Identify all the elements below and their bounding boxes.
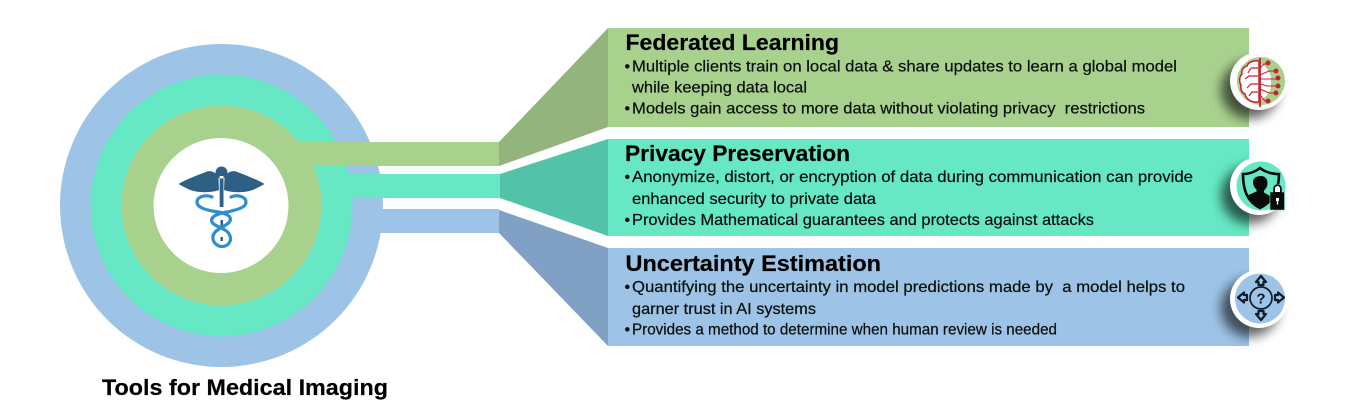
bullet list: Provides Mathematical guarantees and protects against attacks [632,212,1094,229]
bullet list: Anonymize, distort, or encryption of data during communication can provide [632,169,1193,186]
midline [1259,58,1261,107]
caption: Tools for Medical Imaging [102,375,388,400]
connector trapezoid [499,28,608,166]
wings [178,171,264,192]
bullet list: Quantifying the uncertainty in model predictions made by a model helps to [632,279,1185,296]
heading: Federated Learning [626,30,839,55]
lock [1270,184,1284,210]
concentric target with connector bars [60,44,500,367]
icon: uncertainty arrows [1221,270,1288,337]
ball and staff [216,166,228,241]
panel: uncertainty estimation [499,210,1249,346]
serpents [197,196,231,246]
bullet list [624,58,1177,118]
question mark: ? [1256,290,1266,308]
bullet list: while keeping data local [631,80,807,96]
panel: federated learning [499,28,1249,166]
four arrows [1238,276,1284,320]
badge ring [1230,157,1288,215]
centre circle [1250,287,1272,309]
icon: brain and circuit [1221,52,1288,119]
bullet list [624,279,1185,338]
serpent right [212,196,246,236]
panel background [608,28,1249,127]
bullet list: • [624,169,630,186]
bullet list: • [624,100,630,118]
connector trapezoid [500,139,608,236]
badge shadow [1221,279,1279,337]
bullet list: garner trust in AI systems [632,301,816,318]
icon: shield with lock [1221,157,1288,224]
shield outline [1243,168,1279,208]
heading: Privacy Preservation [625,141,850,166]
bullet list: Models gain access to more data without violating privacy restrictions [632,100,1145,118]
green ring [122,106,322,306]
person [1248,176,1270,207]
panel background [608,248,1249,346]
bullet list [624,169,1193,229]
badge fill [1237,57,1285,105]
badge shadow [1221,166,1279,224]
circuit nodes [1266,60,1280,104]
bullet list: • [624,279,630,296]
panel: privacy preservation [500,139,1249,236]
brain left lobe [1240,61,1259,102]
badge ring [1230,52,1288,110]
white centre [154,138,288,273]
badge fill [1235,274,1285,324]
blue connector bar [300,209,499,233]
brain folds [1245,68,1258,96]
green connector bar [297,142,499,166]
teal ring [90,74,352,336]
lock shackle hole and keyhole [1275,186,1280,204]
heading: Uncertainty Estimation [626,251,881,276]
bullet list: • [624,58,630,76]
circuit traces [1260,64,1278,101]
bullet list: Multiple clients train on local data & share updates to learn a global model [632,58,1177,76]
badge shadow [1221,61,1279,119]
teal connector bar [300,174,500,198]
bullet list: • [624,212,630,229]
bullet list: Provides a method to determine when human review is needed [632,322,1057,338]
bullet list: • [624,322,630,338]
outer blue ring [60,44,383,367]
icon: caduceus [178,166,264,246]
connector trapezoid [499,210,608,346]
badge fill [1236,162,1286,210]
badge ring [1230,270,1288,328]
circuit background [1260,63,1271,100]
bullet list: enhanced security to private data [632,191,876,208]
panel background [608,139,1249,236]
